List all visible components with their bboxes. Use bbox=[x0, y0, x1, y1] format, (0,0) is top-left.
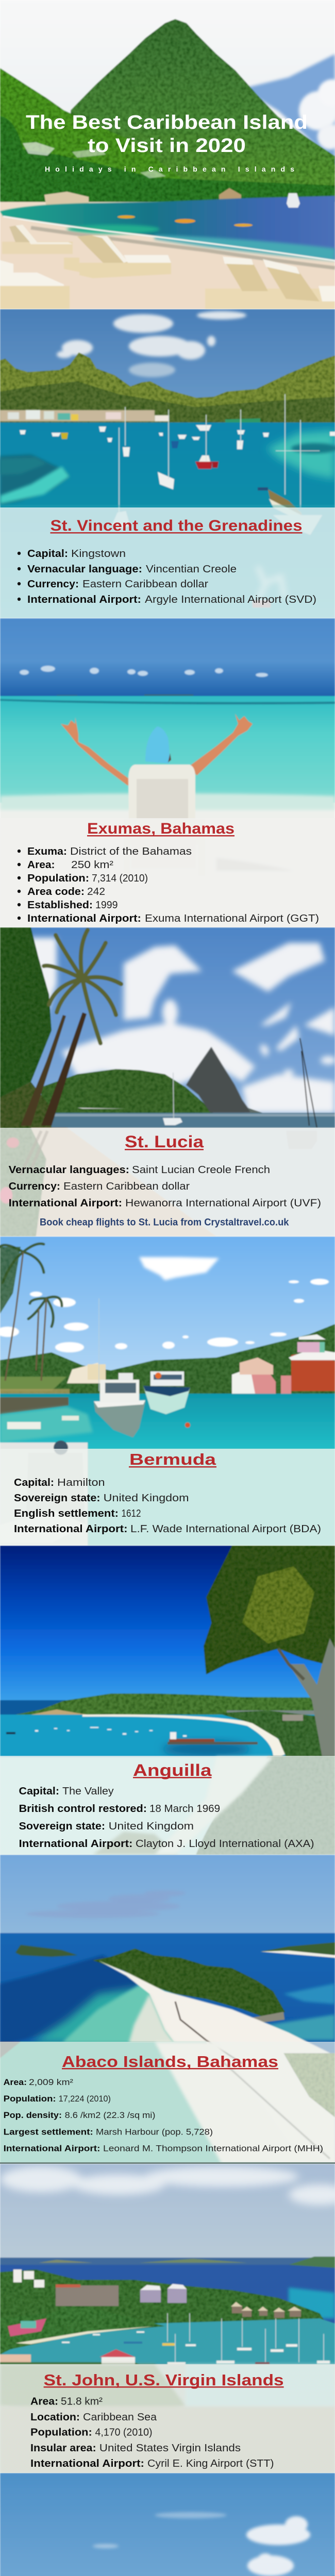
fact list: Area code: bbox=[27, 886, 85, 897]
fact list: Area: bbox=[27, 859, 55, 871]
fact list: International Airport: bbox=[9, 1197, 122, 1209]
fact list bbox=[14, 1477, 321, 1535]
fact list: Established: bbox=[27, 900, 93, 911]
fact list: Kingstown bbox=[71, 548, 126, 560]
fact list: 1612 bbox=[122, 1508, 141, 1519]
fact list: Capital: bbox=[19, 1786, 59, 1797]
fact list: 18 March 1969 bbox=[149, 1803, 220, 1815]
fact list: Capital: bbox=[14, 1477, 54, 1488]
info panel bbox=[0, 1128, 335, 1236]
fact list: United Kingdom bbox=[104, 1493, 189, 1504]
panel background bbox=[0, 507, 335, 618]
fact list: English settlement: bbox=[14, 1508, 119, 1519]
fact list bbox=[4, 2077, 323, 2154]
fact list: District of the Bahamas bbox=[70, 846, 192, 857]
photo: Gros Piton beach bbox=[0, 0, 335, 309]
fact list: Cyril E. King Airport (STT) bbox=[147, 2458, 274, 2469]
fact list: Largest settlement: bbox=[4, 2127, 93, 2137]
fact list: Sovereign state: bbox=[19, 1821, 105, 1832]
section: Exumas, Bahamas bbox=[0, 618, 335, 927]
panel background bbox=[0, 1449, 335, 1546]
photo: man in chair facing turquoise sea bbox=[0, 618, 335, 870]
panel bottom edge bbox=[0, 2162, 335, 2164]
fact list: Pop. density: bbox=[4, 2110, 62, 2120]
panel background bbox=[0, 1756, 335, 1855]
fact list: United States Virgin Islands bbox=[99, 2443, 241, 2454]
panel background bbox=[0, 1128, 335, 1236]
fact list: 1999 bbox=[95, 900, 118, 911]
fact list: Population: bbox=[30, 2427, 92, 2438]
fact list: Vincentian Creole bbox=[146, 564, 237, 575]
fact list: International Airport: bbox=[30, 2458, 144, 2469]
fact list: 8.6 /km2 (22.3 /sq mi) bbox=[65, 2110, 155, 2120]
fact list: 242 bbox=[87, 886, 105, 897]
heading: St. Vincent and the Grenadines bbox=[51, 517, 302, 534]
section: Bermuda bbox=[0, 1236, 335, 1546]
panel background bbox=[0, 2364, 335, 2473]
photo: Bermuda harbour with boats bbox=[0, 1236, 335, 1546]
fact list: Hewanorra International Airport (UVF) bbox=[125, 1197, 321, 1209]
fact list: Exuma: bbox=[27, 846, 67, 857]
fact list: Currency: bbox=[9, 1181, 60, 1192]
fact list: International Airport: bbox=[4, 2143, 100, 2154]
fact list: 51.8 km² bbox=[61, 2396, 103, 2408]
fact list: Vernacular languages: bbox=[9, 1164, 129, 1176]
info panel bbox=[0, 1756, 335, 1855]
fact list: 250 km² bbox=[71, 859, 113, 871]
fact list: Population: bbox=[4, 2094, 56, 2104]
heading: Abaco Islands, Bahamas bbox=[62, 2053, 278, 2071]
section: St. Lucia bbox=[0, 927, 335, 1236]
fact list: 4,170 (2010) bbox=[95, 2427, 153, 2438]
fact list: Eastern Caribbean dollar bbox=[82, 579, 208, 590]
fact list: International Airport: bbox=[27, 594, 141, 605]
fact list bbox=[9, 1164, 321, 1209]
fact list: Sovereign state: bbox=[14, 1493, 100, 1504]
heading: Bermuda bbox=[129, 1450, 216, 1468]
heading: Anguilla bbox=[133, 1761, 212, 1780]
fact list: Argyle International Airport (SVD) bbox=[145, 594, 316, 605]
fact list: Capital: bbox=[27, 548, 68, 560]
photo: Anguilla bay under deep blue sky bbox=[0, 1546, 335, 1855]
fact list: Vernacular language: bbox=[27, 564, 142, 575]
fact list: Hamilton bbox=[57, 1477, 105, 1488]
fact list: L.F. Wade International Airport (BDA) bbox=[130, 1523, 321, 1535]
fact list: Eastern Caribbean dollar bbox=[63, 1181, 190, 1192]
info panel bbox=[0, 818, 335, 927]
section: Abaco Islands, Bahamas bbox=[0, 1855, 335, 2164]
fact list: International Airport: bbox=[14, 1523, 128, 1535]
fact list: International Airport: bbox=[19, 1838, 133, 1850]
fact list: Saint Lucian Creole French bbox=[132, 1164, 270, 1176]
fact list bbox=[19, 1786, 314, 1850]
title: The Best Caribbean Island bbox=[26, 112, 308, 133]
section: Anguilla bbox=[0, 1546, 335, 1855]
fact list: United Kingdom bbox=[109, 1821, 194, 1832]
section: Vieques, Puerto Rico bbox=[0, 2473, 335, 2576]
fact list: 17,224 (2010) bbox=[59, 2094, 111, 2104]
heading: Exumas, Bahamas bbox=[87, 820, 234, 837]
photo: aerial sandbar and islet bbox=[0, 1855, 335, 2164]
fact list: Marsh Harbour (pop. 5,728) bbox=[96, 2127, 213, 2137]
fact list: Caribbean Sea bbox=[83, 2412, 157, 2423]
fact list: Location: bbox=[30, 2412, 80, 2423]
booking call to action: Book cheap flights to St. Lucia from Crystaltravel.co.uk bbox=[40, 1217, 289, 1228]
fact list: 2,009 km² bbox=[29, 2077, 73, 2087]
fact list: Insular area: bbox=[30, 2443, 96, 2454]
fact list: Leonard M. Thompson International Airport (MHH) bbox=[103, 2143, 323, 2154]
fact list: British control restored: bbox=[19, 1803, 147, 1815]
fact list: Clayton J. Lloyd International (AXA) bbox=[136, 1838, 314, 1850]
fact list: International Airport: bbox=[27, 913, 141, 924]
subtitle: Holidays in Caribbean Islands bbox=[45, 165, 294, 173]
fact list bbox=[30, 2396, 274, 2469]
fact list: The Valley bbox=[62, 1786, 114, 1797]
section: St. Vincent and the Grenadines bbox=[0, 309, 335, 618]
heading: St. Lucia bbox=[125, 1132, 204, 1151]
fact list: Currency: bbox=[27, 579, 79, 590]
photo: Pitons and palms bbox=[0, 927, 335, 1236]
fact list: Area: bbox=[4, 2077, 27, 2087]
photo: Cruz Bay with sailboats bbox=[0, 2164, 335, 2473]
fact list: Exuma International Airport (GGT) bbox=[145, 913, 319, 924]
section: St. John, U.S. Virgin Islands bbox=[0, 2164, 335, 2473]
heading: St. John, U.S. Virgin Islands bbox=[44, 2371, 284, 2389]
info panel bbox=[0, 2364, 335, 2473]
title bbox=[26, 112, 308, 157]
fact list bbox=[18, 548, 316, 605]
info panel bbox=[0, 1449, 335, 1546]
title: to Visit in 2020 bbox=[88, 135, 246, 157]
info panel bbox=[0, 507, 335, 618]
fact list: Area: bbox=[30, 2396, 58, 2408]
panel background bbox=[0, 818, 335, 927]
fact list: 7,314 (2010) bbox=[92, 873, 148, 884]
section: hero bbox=[0, 0, 335, 309]
info panel bbox=[0, 2042, 335, 2164]
photo: Vieques beach and headland bbox=[0, 2473, 335, 2576]
panel background bbox=[0, 2042, 335, 2162]
fact list: Population: bbox=[27, 873, 89, 884]
photo: Grenadines harbour bbox=[0, 309, 335, 618]
fact list bbox=[18, 846, 319, 924]
